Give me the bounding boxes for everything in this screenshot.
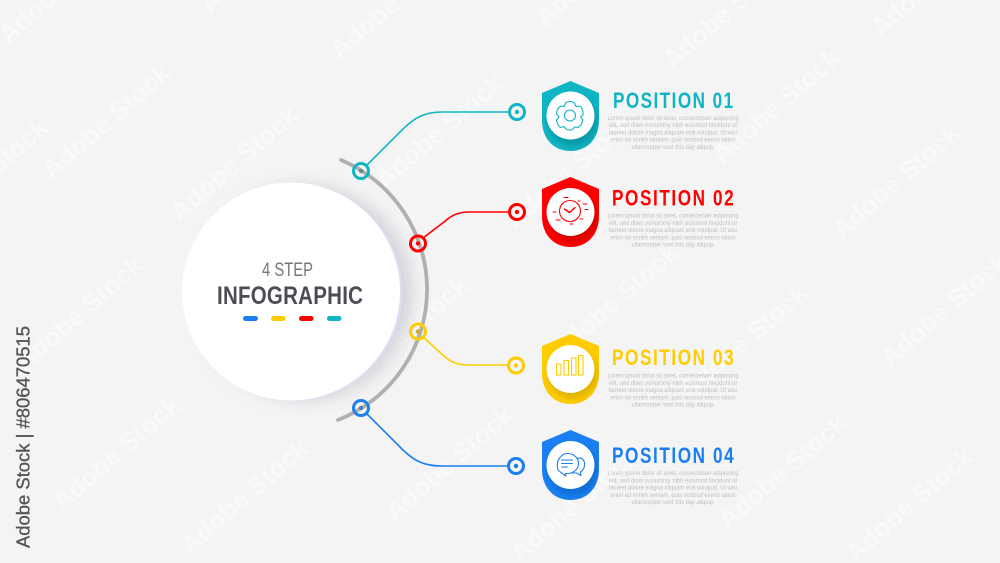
- grey arc: [338, 160, 427, 420]
- watermark pattern: Adobe Stock: [544, 237, 684, 365]
- central heading small: 4 STEP: [262, 260, 313, 281]
- watermark pattern: Adobe Stock: [712, 407, 852, 535]
- heading: position 01: POSITION 01: [613, 89, 733, 114]
- watermark pattern: Adobe Stock: [204, 227, 344, 355]
- heading: position 03: POSITION 03: [612, 346, 734, 371]
- icon: gear: [552, 102, 584, 130]
- body text 04: enim ad minim veniam, quis nostrud exerci tation: [610, 492, 736, 499]
- watermark pattern: Adobe Stock: [36, 57, 176, 185]
- body text 03: laoreet dolore magna aliquam erat volutpat. Ut wisi: [609, 387, 737, 394]
- body text 02: ullamcorper sont this day aliquip.: [632, 242, 715, 248]
- heading: position 04: POSITION 04: [612, 444, 734, 469]
- body text 01: elit, sed diam nonummy nibh euismod tincidunt ut: [609, 122, 737, 129]
- watermark pattern: Adobe Stock: [674, 277, 814, 405]
- central circle: [182, 182, 411, 401]
- body text 02: [608, 212, 739, 248]
- watermark pattern: Adobe Stock: [9, 249, 149, 377]
- panel: position 04: [540, 428, 739, 506]
- body text 04: ullamcorper sont this day aliquip.: [632, 499, 715, 506]
- panel: position 02: [540, 175, 739, 249]
- panel: position 01: [540, 79, 739, 153]
- watermark pattern: Adobe Stock: [164, 99, 304, 227]
- heading: position 02: POSITION 02: [612, 187, 734, 211]
- vertical stock credit: Adobe Stock | #806470515: [14, 326, 34, 548]
- body text 03: elit, sed diam nonummy nibh euismod tincidunt ut: [609, 380, 737, 387]
- body text 01: ullamcorper sont this day aliquip.: [632, 144, 715, 151]
- watermark pattern: Adobe Stock: [46, 389, 186, 517]
- shield 01: [542, 81, 599, 151]
- watermark pattern: Adobe Stock: [499, 107, 639, 235]
- watermark pattern: Adobe Stock: [706, 42, 846, 170]
- body text 03: Lorem ipsum dolor sit amet, consectetuer adipiscing: [608, 372, 739, 380]
- watermark pattern: Adobe Stock: [379, 399, 519, 527]
- shield 03: [542, 334, 599, 404]
- connector: position 04: [354, 400, 524, 474]
- connector: position 01: [354, 104, 524, 178]
- watermark pattern: Adobe Stock: [369, 67, 509, 195]
- panel: position 03: [540, 332, 739, 408]
- body text 04: elit, sed diam nonummy nibh euismod tincidunt ut: [609, 478, 737, 484]
- watermark pattern: Adobe Stock: [174, 432, 314, 560]
- infographic canvas: [16, 81, 738, 548]
- body text 01: enim ad minim veniam, quis nostrud exerci tation: [610, 136, 736, 144]
- body text 02: Lorem ipsum dolor sit amet, consectetuer adipiscing: [608, 212, 739, 220]
- body text 04: Lorem ipsum dolor sit amet, consectetuer adipiscing: [608, 470, 739, 477]
- shield 04: [542, 430, 599, 500]
- body text 02: enim ad minim veniam, quis nostrud exerci tation: [610, 234, 736, 242]
- watermark pattern: Adobe Stock: [334, 269, 474, 397]
- shield 02: [542, 177, 599, 247]
- watermark pattern: Adobe Stock: [826, 117, 966, 245]
- central heading large: INFOGRAPHIC: [217, 281, 363, 309]
- icon: clock: [553, 198, 588, 224]
- body text 03: enim ad minim veniam, quis nostrud exerci tation: [610, 394, 736, 402]
- body text 02: elit, sed diam nonummy nibh euismod tincidunt ut: [609, 220, 737, 227]
- body text 01: Lorem ipsum dolor sit amet, consectetuer adipiscing: [608, 115, 739, 122]
- body text 04: laoreet dolore magna aliquam erat volutpat. Ut wisi: [609, 484, 737, 492]
- body text 03: ullamcorper sont this day aliquip.: [632, 402, 715, 408]
- body text 01: laoreet dolore magna aliquam erat volutpat. Ut wisi: [609, 130, 737, 136]
- icon: chat bubbles: [557, 454, 585, 476]
- icon: bars: [556, 356, 583, 375]
- connector: position 03: [410, 324, 524, 373]
- body text 03: [608, 372, 739, 408]
- colour key dashes: [243, 316, 342, 321]
- body text 04: [608, 470, 739, 506]
- connector: position 02: [410, 204, 524, 251]
- body text 02: laoreet dolore magna aliquam erat volutpat. Ut wisi: [609, 227, 737, 234]
- body text 01: [608, 115, 739, 151]
